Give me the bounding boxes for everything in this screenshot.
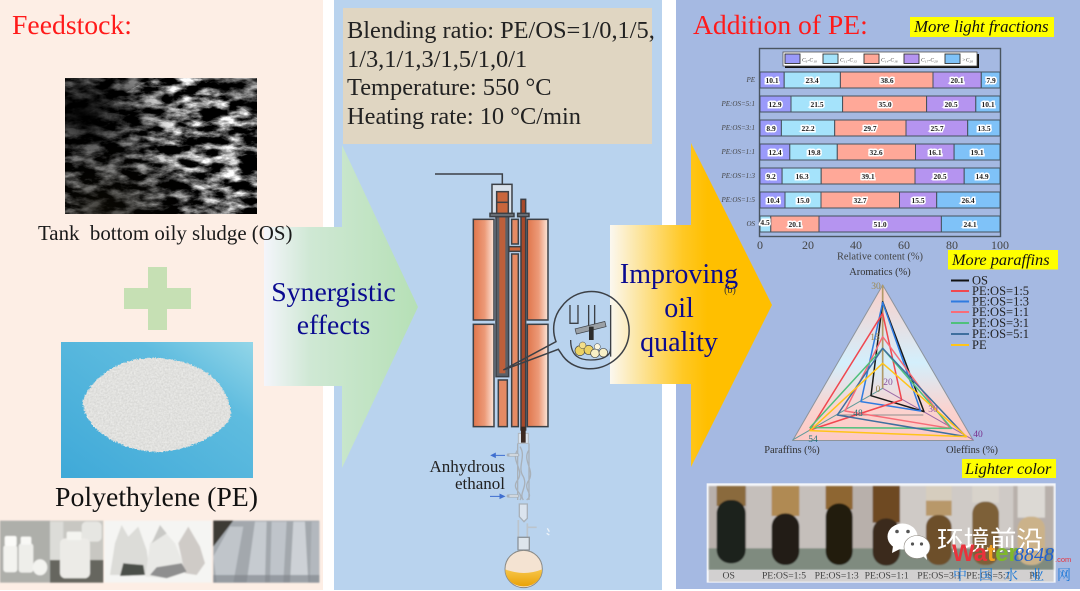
radar legend: PE (972, 338, 987, 352)
tag: more light fractions: More light fractions (913, 17, 1049, 36)
radar axis labels: Aromatics (%) (849, 267, 911, 278)
bar values: 4.5 (760, 218, 770, 227)
radar axis labels: Paraffins (%) (764, 445, 820, 456)
watermark: Water (952, 540, 1018, 567)
photo: oil samples in test tubes (707, 483, 1056, 583)
photo: oil samples in test tubes: PE:OS=1:1 (865, 571, 909, 582)
caption: polyethylene: Polyethylene (PE) (55, 482, 258, 513)
bar values: 32.7 (853, 196, 867, 205)
radar axis ticks: 40 (973, 430, 983, 440)
bar values: 20.1 (788, 220, 802, 229)
bar values: 25.7 (930, 124, 944, 133)
chart legend: C₁₁-C₁₃ (840, 58, 857, 64)
bar values: 23.4 (805, 76, 819, 85)
chart legend: C₁₄-C₁₆ (881, 58, 898, 64)
photo: PE film rolls (213, 521, 319, 583)
row labels: OS (746, 220, 755, 228)
parameter box: Temperature: 550 °C (347, 74, 551, 101)
row labels: PE (745, 76, 756, 84)
bar values: 16.3 (795, 172, 809, 181)
watermark: 水 (1004, 567, 1018, 584)
row labels: PE:OS=1:5 (720, 196, 755, 204)
parameter box: 1/3,1/1,3/1,5/1,0/1 (347, 46, 527, 73)
diagram: pyrolysis reactor (435, 174, 548, 430)
bar chart: relative content (720, 48, 1009, 262)
photo: oil samples in test tubes: PE:OS=1:5 (762, 571, 806, 582)
radar axis ticks: 15 (870, 333, 880, 343)
bar values: 8.9 (766, 124, 776, 133)
bar values (760, 76, 996, 229)
bar values: 12.9 (768, 100, 782, 109)
icon: wechat (888, 524, 930, 560)
radar axis ticks: 48 (853, 409, 863, 419)
watermark: 网 (1057, 568, 1071, 584)
x axis: 40 (850, 238, 862, 252)
row labels: PE:OS=1:3 (720, 172, 755, 180)
radar legend: PE:OS=5:1 (972, 327, 1029, 341)
bar values: 10.4 (766, 196, 780, 205)
bar values: 10.1 (981, 100, 995, 109)
bar values: 9.2 (766, 172, 776, 181)
bar values: 38.6 (880, 76, 894, 85)
radar axis ticks (808, 282, 983, 445)
label: anhydrous ethanol: Anhydrous (429, 457, 505, 476)
icon: plus (124, 267, 191, 330)
radar axis labels: Oleffins (%) (946, 445, 998, 456)
radar chart: product composition (764, 267, 1029, 456)
radar axis labels (764, 267, 998, 456)
bar values: 19.1 (970, 148, 984, 157)
photo: oil samples in test tubes: PE:OS=1:3 (815, 571, 859, 582)
radar axis ticks: 0 (876, 385, 881, 395)
bar values: 16.1 (928, 148, 942, 157)
chart legend: C₆-C₁₀ (802, 58, 817, 64)
radar axis ticks: 20 (883, 378, 893, 388)
x axis title: Relative content (%) (837, 252, 923, 262)
label: anhydrous ethanol: ethanol (455, 474, 505, 493)
caption: oily sludge: Tank bottom oily sludge (OS) (38, 221, 292, 245)
bar values: 39.1 (861, 172, 875, 181)
watermark: 8848 (1014, 544, 1054, 566)
radar axis ticks: 30 (928, 405, 938, 415)
arrow: synergistic effects (264, 145, 418, 468)
callout: magnified stirrer and catalyst (503, 292, 629, 370)
tag: lighter color: Lighter color (964, 459, 1052, 478)
watermark: .com (1055, 555, 1071, 564)
radar axis ticks: 54 (808, 435, 818, 445)
bars (760, 72, 1000, 232)
chart legend: C₁₇-C₂₀ (921, 58, 938, 64)
parameter box: Blending ratio: PE/OS=1/0,1/5, (347, 17, 655, 44)
radar legend: PE:OS=1:5 (972, 284, 1029, 298)
x axis: 0 (757, 238, 763, 252)
photo: oil samples in test tubes: OS (722, 571, 735, 582)
watermark: 中 (953, 567, 967, 584)
bar values: 7.9 (986, 76, 996, 85)
photo: oily sludge (65, 78, 257, 214)
heading: Feedstock: Feedstock: (12, 9, 132, 40)
bar values: 21.5 (810, 100, 824, 109)
row labels: PE:OS=5:1 (720, 100, 755, 108)
arrow: ethanol in (490, 494, 504, 498)
bar values: 13.5 (977, 124, 991, 133)
arrow: synergistic effects: effects (297, 310, 370, 341)
x axis: 80 (946, 238, 958, 252)
photo: PE bags (104, 521, 212, 583)
bar values: 51.0 (873, 220, 887, 229)
bar values: 14.9 (975, 172, 989, 181)
photo: polyethylene powder (61, 342, 253, 478)
panel: addition of PE content (693, 9, 1058, 583)
heading: Addition of PE: Addition of PE: (693, 9, 868, 40)
watermark: 国 (979, 568, 993, 584)
bar values: 20.1 (950, 76, 964, 85)
chart legend: >C₂₀ (962, 58, 973, 64)
x axis (757, 238, 1009, 252)
bar values: 20.5 (944, 100, 958, 109)
photo: oil samples in test tubes: PE (1029, 571, 1041, 582)
row labels (720, 76, 756, 228)
x axis: 60 (898, 238, 910, 252)
parameter box (343, 8, 655, 144)
photo: PE bottles (0, 521, 103, 583)
arrow: improving oil quality: oil (664, 293, 694, 324)
bar values: 32.6 (869, 148, 883, 157)
photo: oil samples in test tubes: PE:OS=3:1 (917, 571, 962, 582)
bar values: 15.5 (911, 196, 925, 205)
arrow: ethanol out (491, 453, 505, 457)
panel: addition of PE background (676, 0, 1080, 589)
radar legend: OS (972, 274, 988, 288)
bar values: 24.1 (963, 220, 977, 229)
panel: process (334, 0, 662, 590)
bar values: 22.2 (801, 124, 815, 133)
arrow: synergistic effects: Synergistic (271, 277, 396, 308)
row labels: PE:OS=3:1 (720, 124, 755, 132)
bar values: 20.5 (933, 172, 947, 181)
bar values: 10.1 (765, 76, 779, 85)
arrow: improving oil quality: Improving (620, 259, 738, 290)
arrow: improving oil quality: quality (640, 327, 718, 358)
bar values: 35.0 (878, 100, 892, 109)
watermark: 业 (1030, 568, 1044, 584)
bar values: 19.8 (807, 148, 821, 157)
radar legend: PE:OS=1:1 (972, 305, 1029, 319)
label: anhydrous ethanol (429, 457, 505, 493)
radar legend (951, 274, 1029, 352)
radar axis ticks: 30 (871, 282, 881, 292)
tag: more paraffins: More paraffins (951, 250, 1050, 269)
bar values: 12.4 (768, 148, 782, 157)
diagram: condenser and flask (490, 427, 549, 588)
radar legend: PE:OS=3:1 (972, 316, 1029, 330)
arrow: improving oil quality (610, 143, 772, 467)
watermark (888, 519, 1071, 584)
parameter box: Heating rate: 10 °C/min (347, 103, 581, 130)
bar values: 26.4 (961, 196, 975, 205)
bar values: 29.7 (863, 124, 877, 133)
watermark: 环境前沿 (937, 519, 1043, 558)
x axis: 20 (802, 238, 814, 252)
radar legend: PE:OS=1:3 (972, 294, 1029, 308)
x axis: 100 (991, 238, 1009, 252)
arrow: improving oil quality: (b) (724, 285, 736, 296)
row labels: PE:OS=1:1 (720, 148, 755, 156)
bar values: 15.0 (796, 196, 810, 205)
photo: oil samples in test tubes: PE:OS=5:1 (966, 571, 1011, 582)
chart legend (783, 52, 979, 68)
panel: feedstock (0, 0, 323, 590)
